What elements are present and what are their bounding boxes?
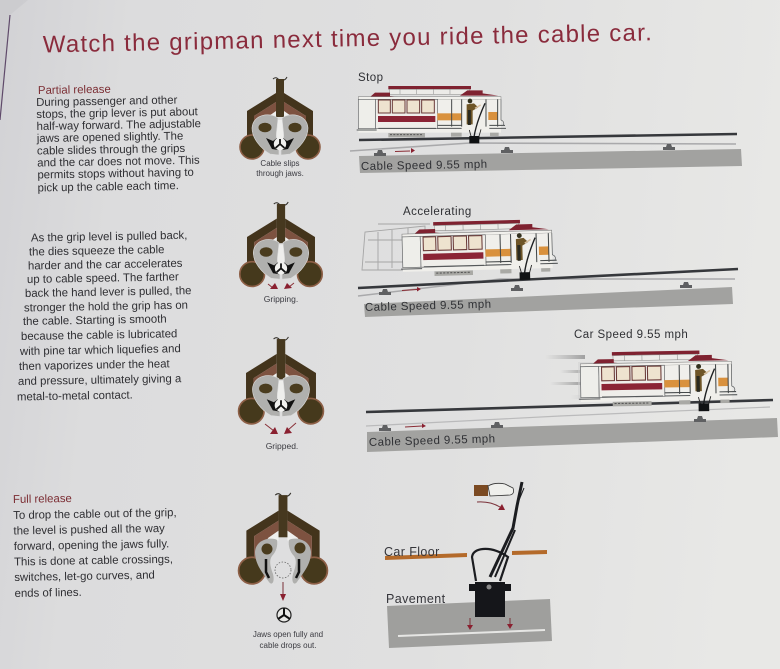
text block: full release: switches, let-go curves, and (14, 570, 155, 584)
diagram: grip gripping: Gripping. (264, 294, 298, 304)
scene: stop: Cable Speed 9.55 mph (361, 159, 488, 173)
scene: car speed: Cable Speed 9.55 mph (369, 433, 496, 449)
scene: stop (350, 72, 742, 173)
grip lever (472, 482, 524, 581)
scene: accelerating (358, 206, 738, 317)
ghost car outline (362, 224, 430, 270)
diagram: grip gripped: Gripped. (266, 441, 298, 451)
grip block (469, 582, 511, 617)
scene: car speed (366, 329, 778, 452)
text block: gripping explanation: stronger the hold the grip has on (24, 300, 188, 314)
title: Watch the gripman next time you ride the cable car. (43, 19, 652, 58)
text block: full release: the level is pushed all the way (13, 523, 165, 537)
text block: gripping explanation: back the hand lever is pulled, the (25, 285, 192, 300)
drop arrows (467, 618, 513, 630)
text block: partial release: pick up the cable each time. (38, 180, 179, 195)
diagram: grip gripped (239, 337, 323, 451)
cable speed arrow (402, 290, 417, 291)
text block: gripping explanation: with pine tar which liquefies and (19, 343, 181, 358)
diagram: grip partial release: Cable slips (260, 159, 300, 168)
pavement (386, 592, 552, 648)
scene: accelerating: Cable Speed 9.55 mph (365, 299, 492, 314)
left edge line (0, 15, 10, 120)
text block: partial release: During passenger and other (36, 95, 178, 109)
text block: gripping explanation: then vaporizes under the heat (19, 358, 171, 373)
text block: partial release: jaws are opened slightly. The (36, 130, 183, 145)
diagram: grip full release: Jaws open fully and (253, 630, 323, 639)
text block: partial release: half-way forward. The adjustable (36, 118, 201, 133)
text block: full release: To drop the cable out of the grip, (13, 507, 177, 522)
text block: gripping explanation: because the cable is lubricated (21, 328, 177, 343)
text block: full release: Full release (13, 493, 72, 506)
scene: accelerating: Accelerating (403, 206, 472, 218)
hand on lever (474, 483, 514, 510)
cable car accelerating (400, 219, 558, 283)
text block: partial release: Partial release (38, 84, 111, 97)
car floor: Car Floor (384, 545, 440, 559)
text block: partial release: cable slides through the grips (37, 143, 186, 158)
cable car stopped (357, 86, 506, 143)
diagram: grip partial release: through jaws. (256, 169, 304, 178)
text block: full release: forward, opening the jaws fully. (14, 538, 169, 553)
diagram: grip full release: cable drops out. (260, 641, 316, 650)
text block: full release: This is done at cable crossings, (14, 554, 173, 568)
text block: partial release: stops, the grip lever is put about (36, 106, 199, 121)
scene: car speed: Car Speed 9.55 mph (574, 329, 688, 341)
cable speed arrow (395, 150, 410, 152)
motion blur (545, 355, 630, 400)
diagram: grip gripping (240, 202, 322, 304)
cable speed arrow (405, 426, 422, 427)
diagram: lever and pavement (384, 482, 552, 648)
text block: partial release: and the car does not move. This (37, 155, 200, 170)
text block: gripping explanation: the dies squeeze the cable (29, 244, 165, 258)
text block: partial release: permits stops without having to (37, 167, 194, 182)
car floor (384, 545, 547, 560)
text block: full release (13, 491, 178, 600)
scene: stop: Stop (358, 72, 383, 84)
diagram: grip partial release (240, 77, 320, 178)
text block: gripping explanation (17, 230, 192, 403)
text block: gripping explanation: harder and the car accelerates (28, 258, 183, 272)
text block: gripping explanation: up to cable speed. The farther (27, 271, 179, 286)
text block: gripping explanation: the cable. Starting is smooth (23, 313, 167, 328)
text block: partial release (35, 82, 202, 195)
pavement: Pavement (386, 592, 446, 606)
cable car moving (578, 350, 737, 413)
text block: gripping explanation: and pressure, ultimately giving a (18, 373, 182, 388)
text block: full release: ends of lines. (14, 587, 82, 600)
text block: gripping explanation: As the grip level is pulled back, (31, 230, 187, 244)
diagram: grip full release (239, 493, 327, 650)
text block: gripping explanation: metal-to-metal contact. (17, 389, 133, 403)
